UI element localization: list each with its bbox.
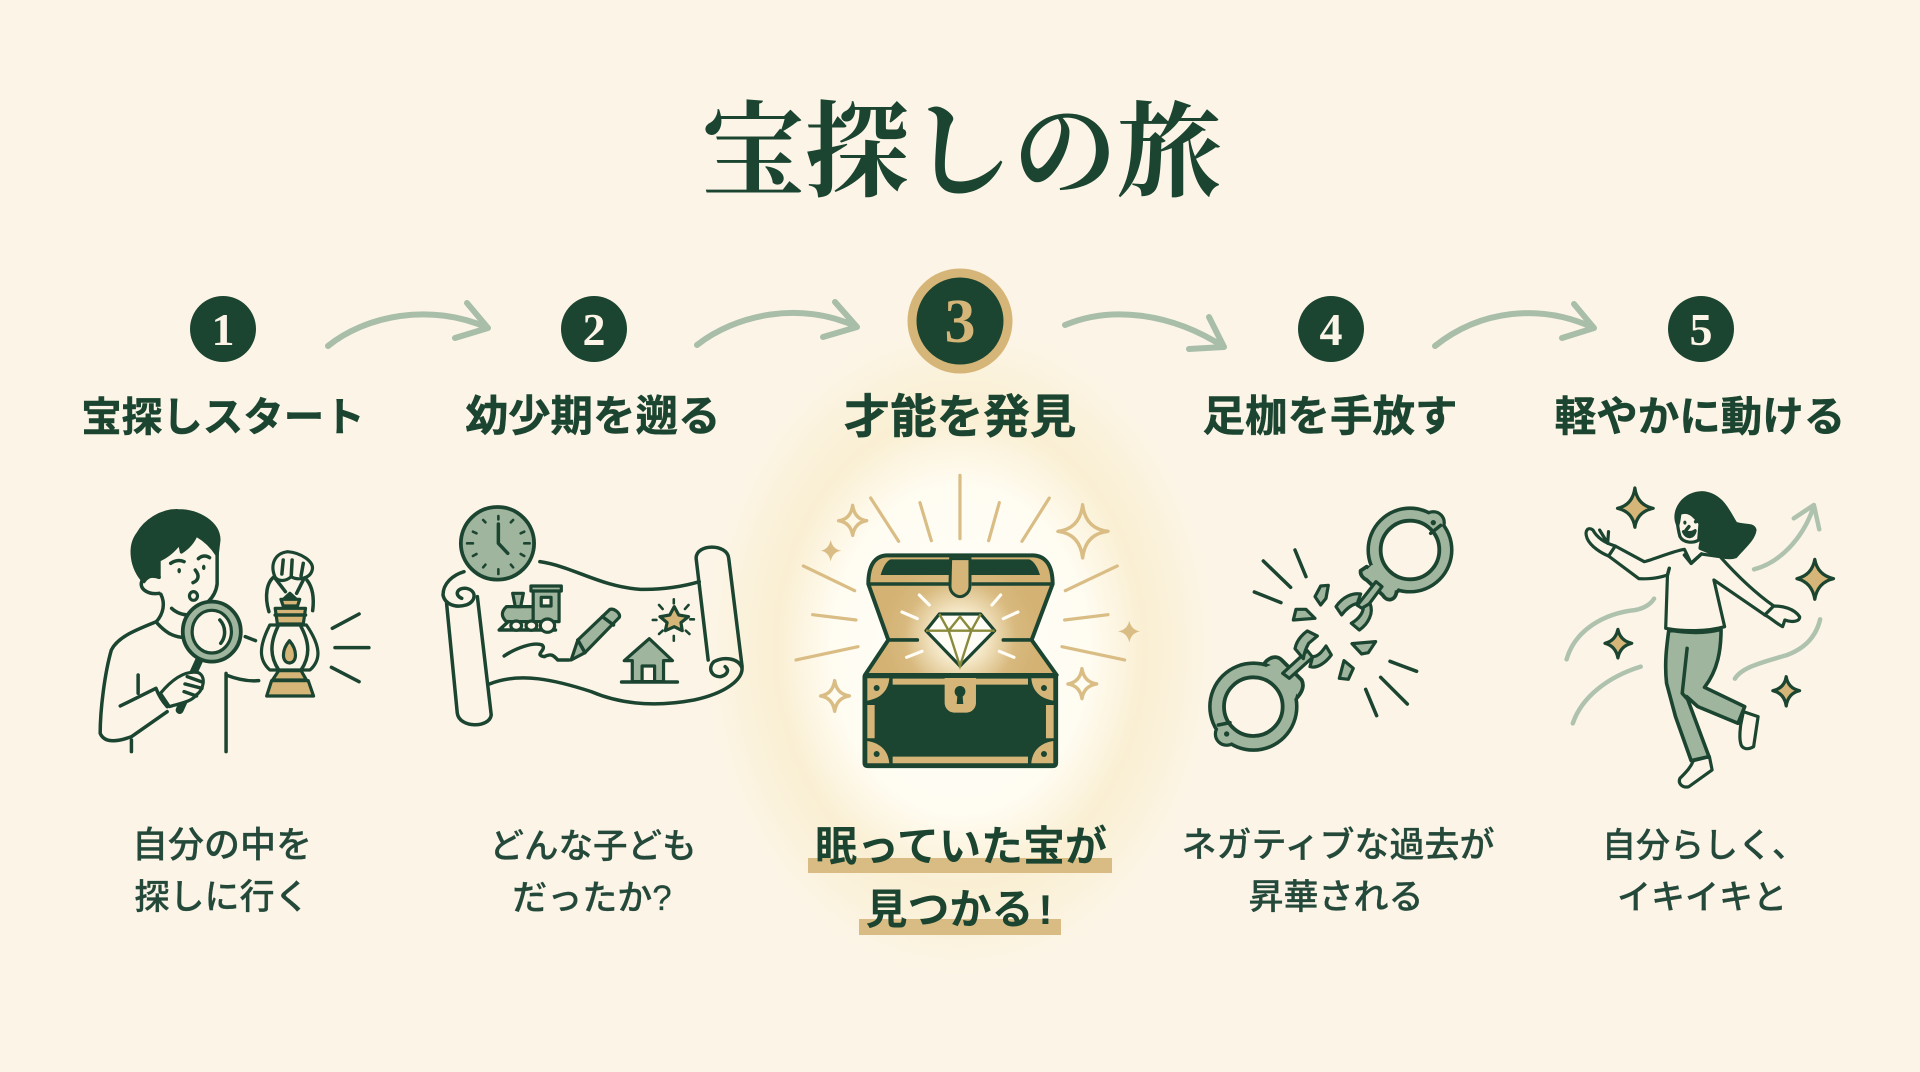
number badge 2	[561, 296, 627, 362]
icon: person with magnifier and lantern	[100, 511, 369, 752]
number badge 3: 3	[944, 288, 976, 356]
lower cuff	[1210, 631, 1331, 750]
description 2	[490, 828, 696, 918]
icon: broken handcuffs	[1210, 508, 1452, 750]
number badge 3	[912, 273, 1008, 369]
arrow: step 2 to 3	[697, 302, 857, 345]
description 2: どんな子ども	[490, 828, 696, 866]
heading 4: 足枷を手放す	[1202, 394, 1458, 441]
title: 宝探しの旅	[701, 96, 1221, 211]
description 5	[1602, 827, 1806, 917]
description 3 with highlight: 眠っていた宝が	[815, 823, 1107, 870]
description 4: ネガティブな過去が	[1182, 826, 1494, 865]
panel: step 3	[796, 273, 1140, 935]
description 1	[132, 824, 312, 917]
number badge 5	[1668, 296, 1734, 362]
heading 2: 幼少期を遡る	[465, 394, 721, 441]
number badge 5: 5	[1690, 304, 1712, 355]
description 1: 探しに行く	[134, 878, 310, 917]
number badge 4	[1298, 296, 1364, 362]
description 4	[1182, 826, 1494, 917]
arrow: step 3 to 4	[1065, 314, 1224, 349]
description 3 with highlight	[808, 823, 1112, 935]
impact lines	[1254, 550, 1417, 716]
heading 1: 宝探しスタート	[81, 394, 365, 440]
panel: step 1	[81, 296, 369, 917]
number badge 2: 2	[582, 304, 606, 355]
number badge 1	[190, 296, 256, 362]
number badge 1: 1	[212, 304, 234, 355]
rays	[796, 475, 1125, 660]
chest body	[864, 675, 1057, 767]
panel: step 2	[443, 296, 742, 918]
description 4: 昇華される	[1248, 878, 1424, 917]
panel: step 5	[1555, 296, 1845, 917]
arrow: step 4 to 5	[1435, 304, 1594, 346]
description 5: イキイキと	[1617, 879, 1787, 917]
arrow: step 1 to 2	[328, 303, 488, 346]
number badge 4: 4	[1320, 304, 1342, 355]
shards	[1315, 585, 1328, 605]
icon: treasure map scroll with memories	[443, 507, 742, 725]
description 1: 自分の中を	[132, 824, 312, 865]
heading 3: 才能を発見	[844, 391, 1076, 443]
description 3 with highlight: 見つかる!	[865, 886, 1053, 933]
inner shine	[902, 595, 1018, 657]
glow behind step 3	[705, 325, 1215, 975]
description 5: 自分らしく、	[1602, 827, 1806, 865]
heading 5: 軽やかに動ける	[1555, 393, 1845, 440]
diamond	[926, 614, 995, 666]
icon: dancing woman with sparkles	[1567, 488, 1834, 787]
panel: step 4	[1182, 296, 1494, 917]
description 2: だったか?	[512, 879, 672, 918]
chest interior and lid	[865, 555, 1057, 675]
upper cuff	[1336, 508, 1452, 630]
sparkles	[821, 505, 1108, 711]
icon: open treasure chest with diamond	[796, 475, 1140, 767]
